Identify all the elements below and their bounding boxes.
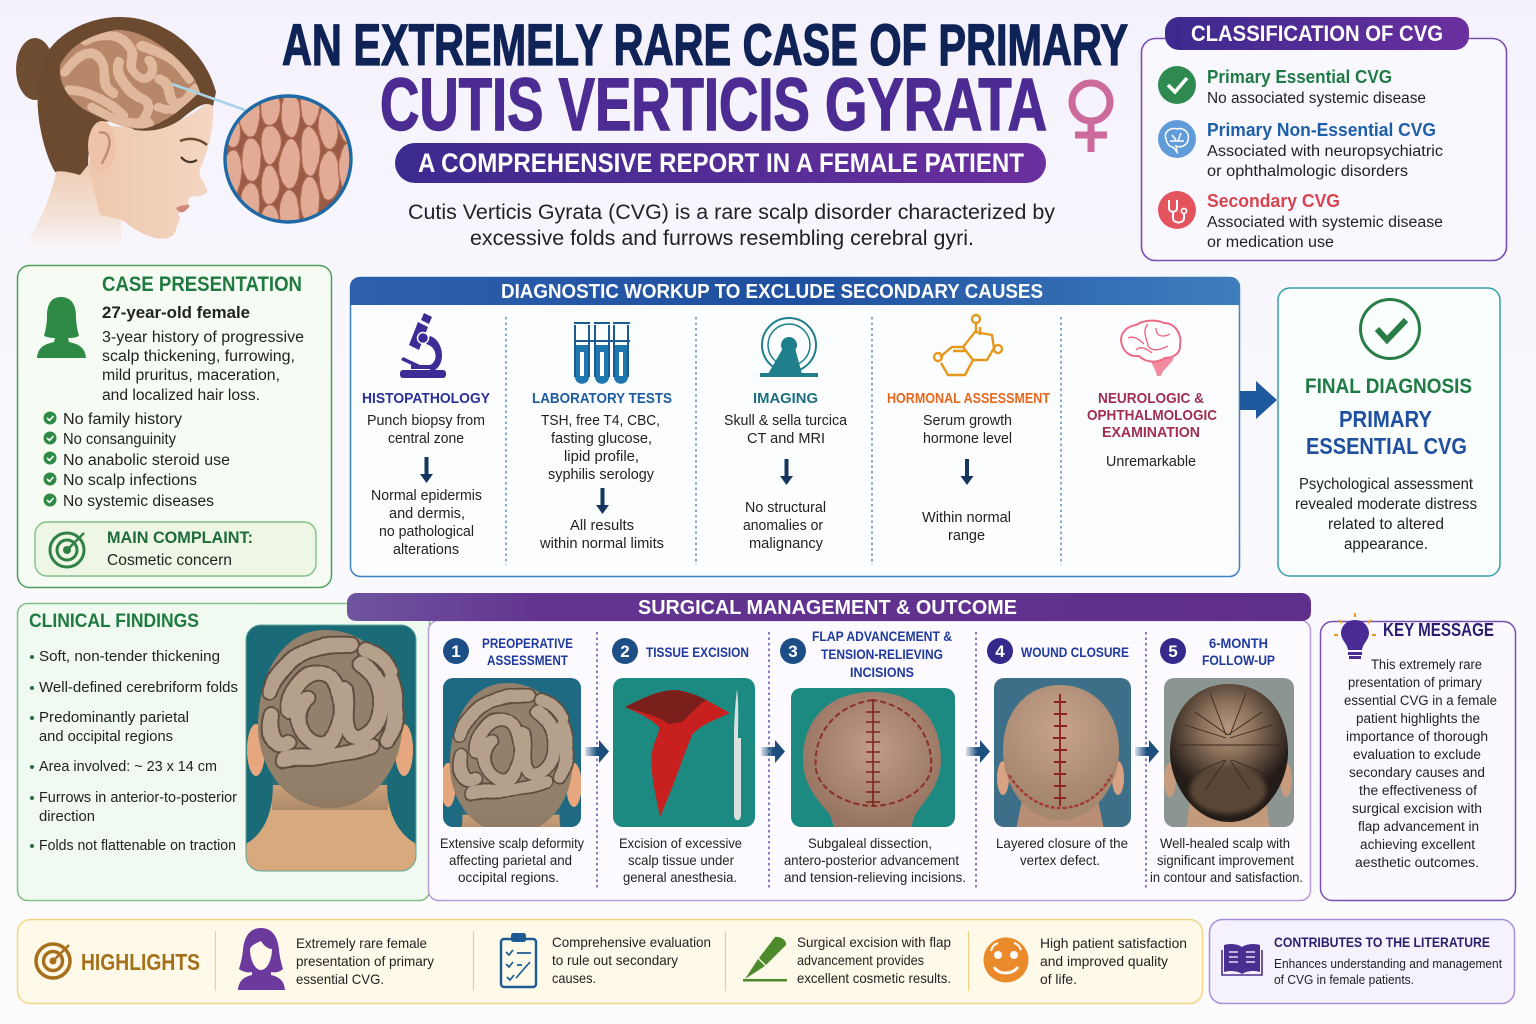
arrow down (596, 488, 609, 514)
laboratory text: TSH, free T4, CBC, (541, 413, 660, 429)
highlight text 2: causes. (552, 970, 596, 986)
arrow down (420, 457, 433, 483)
arrow: step 2 to 3 (761, 740, 785, 763)
column: imaging: IMAGING (753, 390, 818, 407)
main complaint box: MAIN COMPLAINT: (107, 529, 253, 547)
key message text: secondary causes and (1349, 765, 1485, 780)
step 1 heading: ASSESSMENT (487, 653, 569, 668)
step 5 heading (1202, 636, 1275, 668)
diagnostic heading: DIAGNOSTIC WORKUP TO EXCLUDE SECONDARY CAUSES (501, 281, 1043, 303)
key message heading: KEY MESSAGE (1383, 620, 1494, 640)
step badge 5: 5 (1168, 642, 1178, 661)
highlight text 3 (797, 934, 951, 986)
step 1: preoperative assessment (441, 638, 584, 885)
step 4: wound closure (987, 638, 1131, 868)
highlight text 1 (296, 935, 434, 987)
findings list: direction (39, 809, 95, 825)
highlight text 4: High patient satisfaction (1040, 935, 1187, 951)
findings list: Furrows in anterior-to-posterior (39, 790, 237, 806)
column: histopathology: HISTOPATHOLOGY (362, 390, 490, 407)
step 1 caption: affecting parietal and (449, 852, 572, 868)
step 2 caption: scalp tissue under (628, 852, 734, 868)
literature text: Enhances understanding and management (1274, 957, 1503, 971)
step 3 heading: INCISIONS (850, 665, 914, 680)
case history: scalp thickening, furrowing, (102, 348, 295, 365)
classification heading: CLASSIFICATION OF CVG (1191, 21, 1443, 46)
panel: case presentation (18, 266, 332, 588)
type: primary non-essential: Primary Non-Essential CVG (1207, 119, 1436, 140)
neurologic heading: EXAMINATION (1102, 424, 1200, 441)
clinical heading: CLINICAL FINDINGS (29, 611, 199, 632)
photo: flap advancement (791, 688, 955, 830)
highlight text 2: to rule out secondary (552, 952, 678, 968)
step 1 heading: PREOPERATIVE (482, 636, 573, 651)
literature text (1274, 957, 1503, 987)
step badge 1 (443, 638, 469, 664)
psychological assessment text: revealed moderate distress (1295, 496, 1477, 513)
psychological assessment text: Psychological assessment (1299, 476, 1474, 493)
laboratory text: lipid profile, (564, 449, 639, 465)
main complaint box: Cosmetic concern (107, 552, 232, 569)
arrow: step 4 to 5 (1135, 740, 1159, 763)
photo: preoperative scalp (443, 678, 581, 827)
findings list: Soft, non-tender thickening (39, 649, 220, 665)
main complaint box (35, 522, 316, 576)
step badge 2 (612, 638, 638, 664)
histopathology text: Normal epidermis (371, 488, 482, 504)
step 5 heading: FOLLOW-UP (1202, 653, 1275, 668)
panel: diagnostic workup (350, 277, 1240, 576)
step 5 caption: in contour and satisfaction. (1150, 869, 1303, 885)
icon: female symbol (1072, 83, 1110, 152)
panel: clinical findings (18, 604, 430, 900)
imaging text: CT and MRI (747, 431, 825, 447)
key message text: This extremely rare (1371, 657, 1482, 672)
step 4 caption: vertex defect. (1020, 852, 1100, 868)
type: secondary: or medication use (1207, 234, 1334, 251)
hormonal text (922, 413, 1012, 544)
title: AN EXTREMELY RARE CASE OF PRIMARY (282, 13, 1128, 78)
photo: wound closure (994, 678, 1131, 830)
arrow: to final diagnosis (1240, 381, 1277, 419)
introduction text (408, 201, 1056, 250)
findings list: Predominantly parietal (39, 710, 189, 726)
type: primary non-essential: or ophthalmologic disorders (1207, 163, 1408, 180)
findings list: Folds not flattenable on traction (39, 838, 236, 854)
highlights heading: HIGHLIGHTS (81, 949, 200, 975)
column: hormonal assessment: HORMONAL ASSESSMENT (887, 390, 1050, 407)
step badge 5 (1160, 638, 1186, 664)
histopathology text: alterations (393, 542, 459, 558)
step badge 1: 1 (451, 642, 461, 661)
psychological assessment text (1295, 476, 1477, 553)
icon: green check (1158, 66, 1196, 104)
type: secondary: Associated with systemic disease (1207, 214, 1443, 231)
laboratory text (539, 413, 664, 552)
highlight text 4: and improved quality (1040, 953, 1168, 969)
icon: blue brain (1158, 120, 1196, 158)
histopathology text: and dermis, (389, 506, 465, 522)
imaging text: anomalies or (743, 518, 823, 534)
type: primary essential: No associated systemic disease (1207, 90, 1426, 107)
diagnosis name: PRIMARY (1339, 406, 1432, 432)
type: primary essential (1207, 66, 1426, 107)
key message text: flap advancement in (1358, 819, 1479, 834)
arrow down (780, 459, 793, 485)
negative history checklist: No family history (63, 411, 182, 428)
step 2 caption (619, 835, 742, 885)
hormonal text: hormone level (923, 431, 1012, 447)
laboratory text: syphilis serology (548, 467, 655, 483)
step 1 heading (482, 636, 573, 668)
negative history checklist (44, 411, 230, 510)
hormonal text: Serum growth (923, 413, 1012, 429)
step 5 caption: Well-healed scalp with (1160, 835, 1290, 851)
negative history checklist: No consanguinity (63, 431, 176, 448)
icon: MRI scanner (760, 318, 818, 377)
column: histopathology (362, 313, 490, 558)
panel: key message (1320, 613, 1516, 900)
findings list (30, 649, 238, 854)
column: imaging (724, 318, 848, 552)
panel: contributes to the literature (1210, 920, 1514, 1004)
icon: clipboard (501, 933, 536, 987)
column: hormonal assessment (887, 315, 1050, 544)
icon: open book (1222, 944, 1262, 975)
key message text: importance of thorough (1346, 729, 1488, 744)
laboratory text: All results (570, 518, 634, 534)
step 2: tissue excision (612, 638, 755, 885)
hormonal text: range (948, 528, 985, 544)
neurologic heading: NEUROLOGIC & (1098, 390, 1204, 407)
imaging text: No structural (745, 500, 826, 516)
type: secondary (1207, 190, 1443, 251)
subtitle pill (395, 143, 1046, 183)
psychological assessment text: related to altered (1328, 516, 1444, 533)
highlight text 1: Extremely rare female (296, 935, 427, 951)
step 3: flap advancement (780, 629, 966, 885)
column: neurologic examination: Unremarkable (1106, 454, 1196, 470)
hormonal text: Within normal (922, 510, 1011, 526)
step 3 caption: antero-posterior advancement (784, 852, 959, 868)
column: laboratory tests: LABORATORY TESTS (532, 390, 672, 407)
icon: target (36, 944, 70, 978)
highlight text 4: of life. (1040, 971, 1077, 987)
neurologic heading (1087, 390, 1217, 441)
case history: mild pruritus, maceration, (102, 367, 280, 384)
icon: molecule (934, 315, 1002, 375)
diagnosis name: ESSENTIAL CVG (1306, 433, 1467, 459)
step 3 caption (784, 835, 966, 885)
histopathology text: no pathological (379, 524, 474, 540)
negative history checklist: No systemic diseases (63, 493, 214, 510)
findings list: and occipital regions (39, 729, 173, 745)
step badge 4 (987, 638, 1013, 664)
icon: brain (1121, 321, 1180, 376)
key message text: the effectiveness of (1359, 783, 1477, 798)
type: primary non-essential: Associated with neuropsychiatric (1207, 143, 1443, 160)
step 2 heading: TISSUE EXCISION (646, 645, 749, 660)
step 2 caption: Excision of excessive (619, 835, 742, 851)
icon: test tubes (574, 323, 630, 384)
type: secondary: Secondary CVG (1207, 190, 1340, 211)
laboratory text: fasting glucose, (551, 431, 652, 447)
findings list: Area involved: ~ 23 x 14 cm (39, 759, 217, 775)
icon: light bulb (1334, 613, 1376, 659)
key message text: aesthetic outcomes. (1355, 855, 1479, 870)
step 5 caption: significant improvement (1157, 852, 1294, 868)
case heading: CASE PRESENTATION (102, 273, 302, 296)
arrow down (960, 459, 974, 485)
step badge 2: 2 (620, 642, 630, 661)
photo: excised tissue and scalpel (613, 678, 755, 827)
neurologic heading: OPHTHALMOLOGIC (1087, 407, 1217, 424)
diagnosis name (1306, 406, 1467, 459)
icon: check circle (1360, 300, 1420, 358)
icon: microscope (400, 313, 446, 378)
step 5: follow-up (1150, 636, 1303, 885)
step 5 caption (1150, 835, 1303, 885)
key message text: patient highlights the (1356, 711, 1480, 726)
arrow: step 1 to 2 (585, 740, 609, 763)
zoomed scalp circle (223, 94, 353, 224)
psychological assessment text: appearance. (1344, 536, 1428, 553)
step 4 heading: WOUND CLOSURE (1021, 645, 1129, 660)
photo: healed scalp (1164, 678, 1294, 830)
histopathology text: Punch biopsy from (367, 413, 485, 429)
surgical heading: SURGICAL MANAGEMENT & OUTCOME (638, 596, 1017, 619)
step 4 caption (996, 835, 1128, 868)
title (282, 13, 1128, 146)
step 1 caption: Extensive scalp deformity (440, 835, 584, 851)
laboratory text: within normal limits (539, 536, 664, 552)
step badge 4: 4 (995, 642, 1005, 661)
panel: final diagnosis (1278, 288, 1500, 576)
column: neurologic examination (1087, 321, 1217, 470)
type: primary essential: Primary Essential CVG (1207, 66, 1392, 87)
icon: patient silhouette (37, 297, 86, 358)
key message text: surgical excision with (1352, 801, 1482, 816)
imaging text (724, 413, 848, 552)
key message text (1344, 657, 1497, 870)
highlight text 1: presentation of primary (296, 953, 434, 969)
classification heading (1165, 17, 1469, 50)
step 3 heading (812, 629, 952, 680)
step badge 3: 3 (788, 642, 798, 661)
highlight text 2 (552, 934, 711, 986)
highlight text 4 (1040, 935, 1187, 987)
imaging text: Skull & sella turcica (724, 413, 848, 429)
histopathology text: central zone (388, 431, 464, 447)
step 5 heading: 6-MONTH (1209, 636, 1268, 651)
step 3 caption: Subgaleal dissection, (808, 835, 932, 851)
key message text: presentation of primary (1348, 675, 1482, 690)
illustration: female head with cerebriform scalp (16, 17, 216, 246)
surgical heading (347, 593, 1311, 621)
step 2 caption: general anesthesia. (623, 869, 737, 885)
findings list: Well-defined cerebriform folds (39, 680, 238, 696)
introduction text: excessive folds and furrows resembling cerebral gyri. (470, 227, 974, 250)
step 1 caption: occipital regions. (458, 869, 559, 885)
highlight text 1: essential CVG. (296, 971, 384, 987)
connector line (172, 84, 245, 110)
icon: smiley (984, 938, 1028, 982)
step 1 caption (440, 835, 584, 885)
type: primary non-essential (1207, 119, 1443, 180)
step 4 caption: Layered closure of the (996, 835, 1128, 851)
title: CUTIS VERTICIS GYRATA (380, 63, 1047, 146)
icon: scalpel (743, 937, 787, 982)
arrow: step 3 to 4 (966, 740, 990, 763)
case history: 3-year history of progressive (102, 329, 304, 346)
highlight text 2: Comprehensive evaluation (552, 934, 711, 950)
key message text: evaluation to exclude (1353, 747, 1481, 762)
step 3 heading: TENSION-RELIEVING (821, 647, 943, 662)
step 3 heading: FLAP ADVANCEMENT & (812, 629, 952, 644)
literature text: of CVG in female patients. (1274, 973, 1414, 987)
case history: and localized hair loss. (102, 387, 260, 404)
highlight text 3: Surgical excision with flap (797, 934, 951, 950)
step 3 caption: and tension-relieving incisions. (784, 869, 966, 885)
final diagnosis heading: FINAL DIAGNOSIS (1305, 375, 1472, 398)
subtitle pill: A COMPREHENSIVE REPORT IN A FEMALE PATIENT (418, 148, 1024, 178)
column: laboratory tests (532, 323, 672, 552)
highlight text 3: advancement provides (797, 952, 924, 968)
panel: highlights (18, 920, 1202, 1004)
icon: red stethoscope (1158, 191, 1196, 229)
panel: surgical management (347, 593, 1311, 900)
diagnostic heading (350, 277, 1240, 305)
step badge 3 (780, 638, 806, 664)
introduction text: Cutis Verticis Gyrata (CVG) is a rare scalp disorder characterized by (408, 201, 1056, 224)
histopathology text (367, 413, 485, 558)
negative history checklist: No anabolic steroid use (63, 452, 230, 469)
highlight text 3: excellent cosmetic results. (797, 970, 951, 986)
case history (102, 304, 304, 404)
negative history checklist: No scalp infections (63, 472, 197, 489)
case history: 27-year-old female (102, 304, 250, 322)
photo: back of head with cerebriform folds (240, 625, 420, 880)
icon: woman (238, 928, 285, 990)
panel: classification of CVG (1142, 17, 1506, 260)
key message text: achieving excellent (1360, 837, 1475, 852)
key message text: essential CVG in a female (1344, 693, 1497, 708)
literature heading: CONTRIBUTES TO THE LITERATURE (1274, 935, 1490, 950)
imaging text: malignancy (749, 536, 824, 552)
